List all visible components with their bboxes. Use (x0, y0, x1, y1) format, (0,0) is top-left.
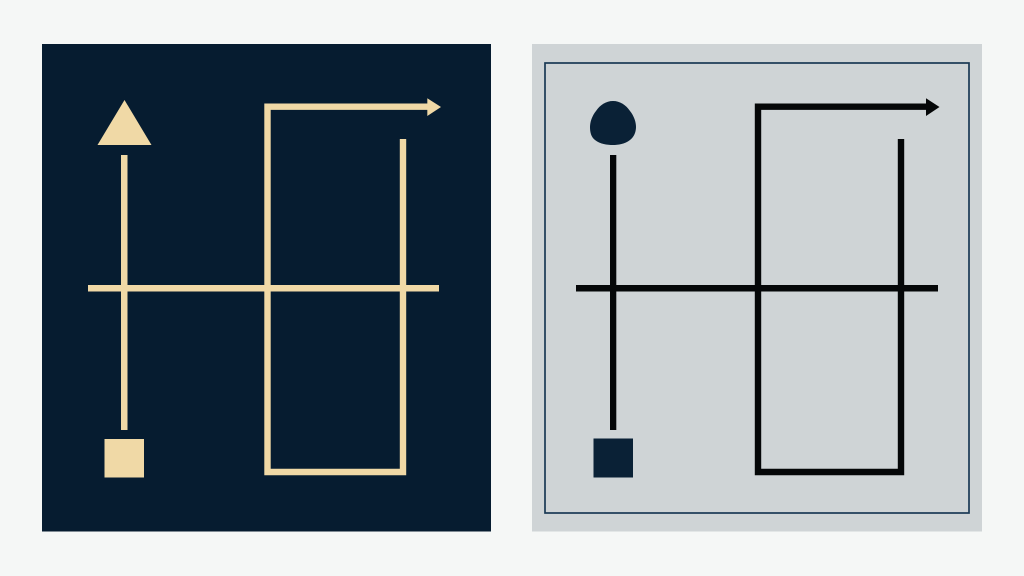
dark panel background (42, 44, 491, 532)
horizontal line (576, 285, 938, 292)
icon: rounded blob (590, 101, 636, 145)
panel: dark diagram (42, 44, 491, 532)
vertical line: left (610, 155, 616, 430)
panel: light diagram (532, 44, 982, 532)
horizontal line (88, 285, 439, 292)
vertical line: left (121, 155, 128, 430)
arrow: routed path (268, 98, 441, 472)
panel inner border (545, 63, 969, 513)
icon: square (104, 439, 144, 478)
light panel background (532, 44, 982, 532)
arrow: routed path (758, 98, 940, 472)
icon: triangle (98, 100, 152, 145)
icon: square (594, 438, 633, 478)
